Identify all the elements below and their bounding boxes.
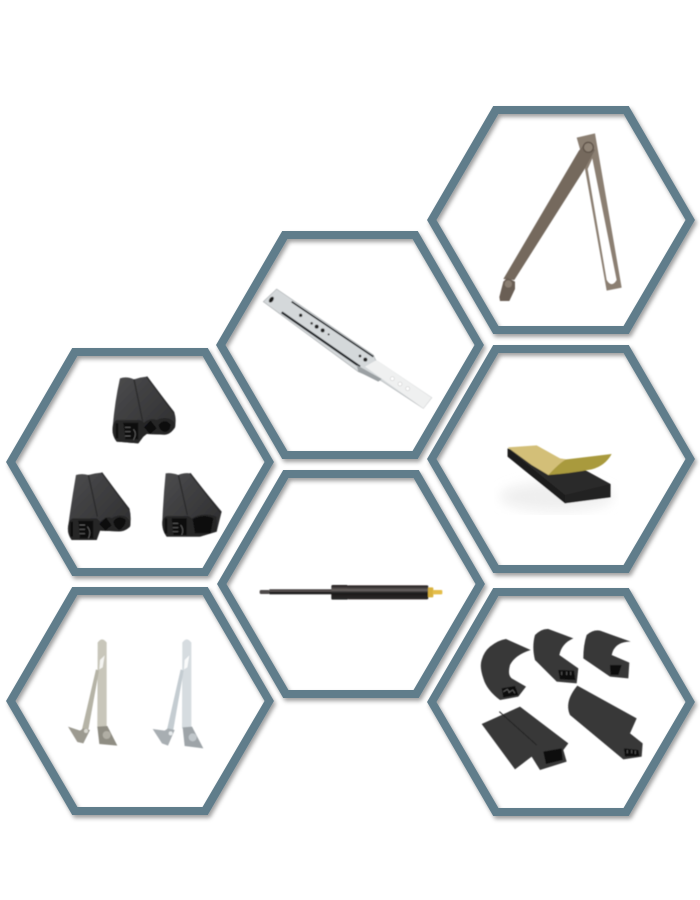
product: five rubber profiles <box>481 629 643 770</box>
product: drawer slide <box>263 289 432 408</box>
product: gas strut <box>260 585 442 600</box>
hexagon frame <box>427 345 695 573</box>
product: bronze slotted stay <box>499 133 622 301</box>
hexagon frame <box>6 587 274 815</box>
panel: ball bearing drawer slide <box>216 231 484 459</box>
hexagon frame <box>217 470 485 698</box>
hexagon frame <box>427 106 695 334</box>
panel: top right folding stay <box>427 106 695 334</box>
product: foam strip with yellow liner <box>500 445 613 512</box>
hexagon frame <box>6 348 274 576</box>
hexagon frame <box>427 588 695 816</box>
panel: adhesive foam tape <box>427 345 695 573</box>
panel: door seal profiles <box>6 348 274 576</box>
panel: rubber edge profiles <box>427 588 695 816</box>
hexagon frame <box>216 231 484 459</box>
product: two folding lid stays <box>68 639 203 748</box>
panel: gas spring <box>217 470 485 698</box>
product: three rubber seals <box>68 377 222 540</box>
panel: lid stays <box>6 587 274 815</box>
